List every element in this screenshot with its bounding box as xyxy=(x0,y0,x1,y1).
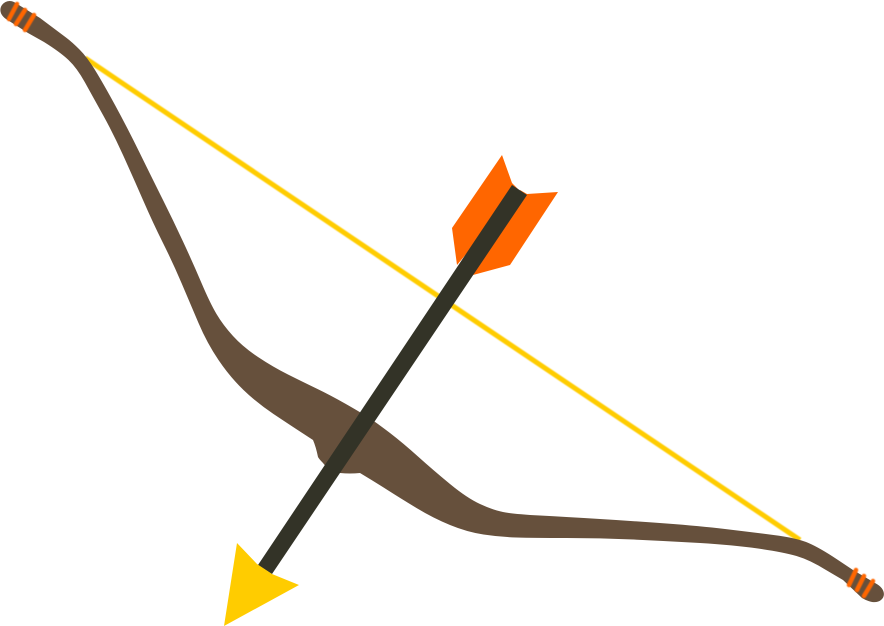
arrow fletching xyxy=(452,155,558,275)
arrow shaft xyxy=(258,185,527,574)
lower bow tip bands xyxy=(849,570,873,596)
upper bow tip bands xyxy=(9,4,34,30)
arrow xyxy=(224,155,558,626)
arrow head xyxy=(224,543,299,626)
bowstring xyxy=(85,58,800,540)
